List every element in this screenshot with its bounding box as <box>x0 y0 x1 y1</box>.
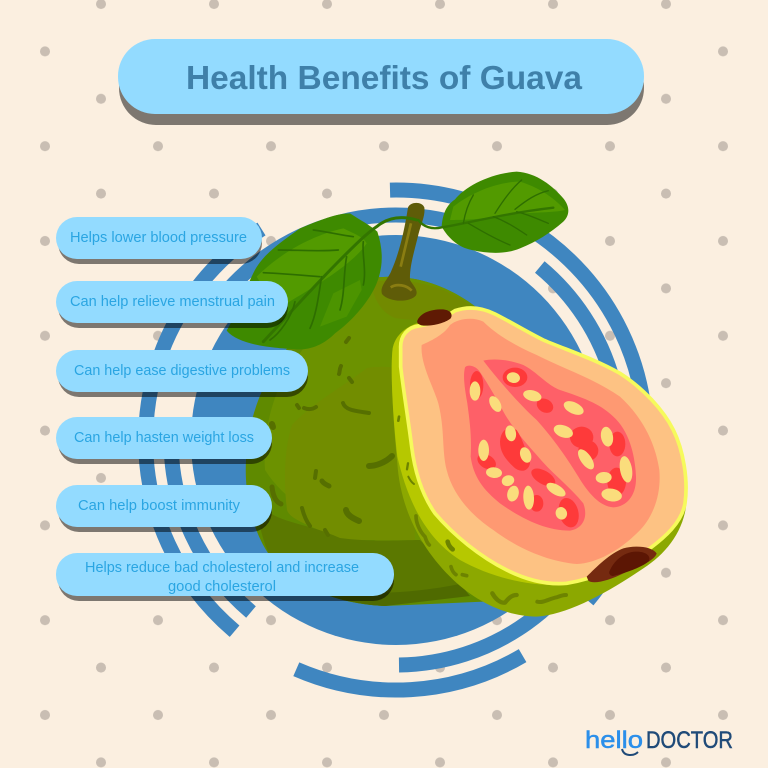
logo: helloDOCTOR: DOCTOR <box>646 727 733 754</box>
seeds <box>470 371 634 521</box>
flesh with yellow rim <box>401 308 686 584</box>
left leaf <box>227 213 417 349</box>
benefit pill 3 <box>56 350 308 397</box>
title text: Health Benefits of Guava <box>186 59 583 96</box>
seed chambers <box>464 366 585 531</box>
benefit pill 6 <box>56 553 394 601</box>
benefit pill 5 <box>56 485 272 532</box>
back guava body <box>246 277 520 606</box>
benefit pill 6: good cholesterol <box>168 578 276 595</box>
benefit pill 2 <box>56 281 288 328</box>
stem and leaves <box>227 172 568 349</box>
title banner <box>118 39 644 125</box>
peel <box>392 323 687 617</box>
benefit pill 1: Helps lower blood pressure <box>70 229 247 246</box>
blue circle backdrop and arcs <box>146 190 646 690</box>
benefit pill 4: Can help hasten weight loss <box>74 429 254 446</box>
benefit pill 5: Can help boost immunity <box>78 497 240 514</box>
halved guava <box>392 308 687 617</box>
bottom calyx scar <box>587 547 657 582</box>
benefit pill 6: Helps reduce bad cholesterol and increase <box>85 559 359 576</box>
logo: helloDOCTOR: hello <box>585 727 643 754</box>
skin marks on back guava <box>272 338 392 535</box>
right leaf <box>418 172 568 253</box>
benefit pill 1 <box>56 217 262 264</box>
top calyx scar <box>417 309 452 326</box>
benefit pill 3: Can help ease digestive problems <box>74 362 290 379</box>
logo: helloDOCTOR <box>585 727 733 755</box>
benefit pill 4 <box>56 417 272 464</box>
red pulp spots <box>470 368 626 530</box>
inner flesh <box>422 319 660 564</box>
benefit pill 2: Can help relieve menstrual pain <box>70 293 275 310</box>
stem <box>382 203 425 301</box>
peel marks <box>398 417 566 603</box>
